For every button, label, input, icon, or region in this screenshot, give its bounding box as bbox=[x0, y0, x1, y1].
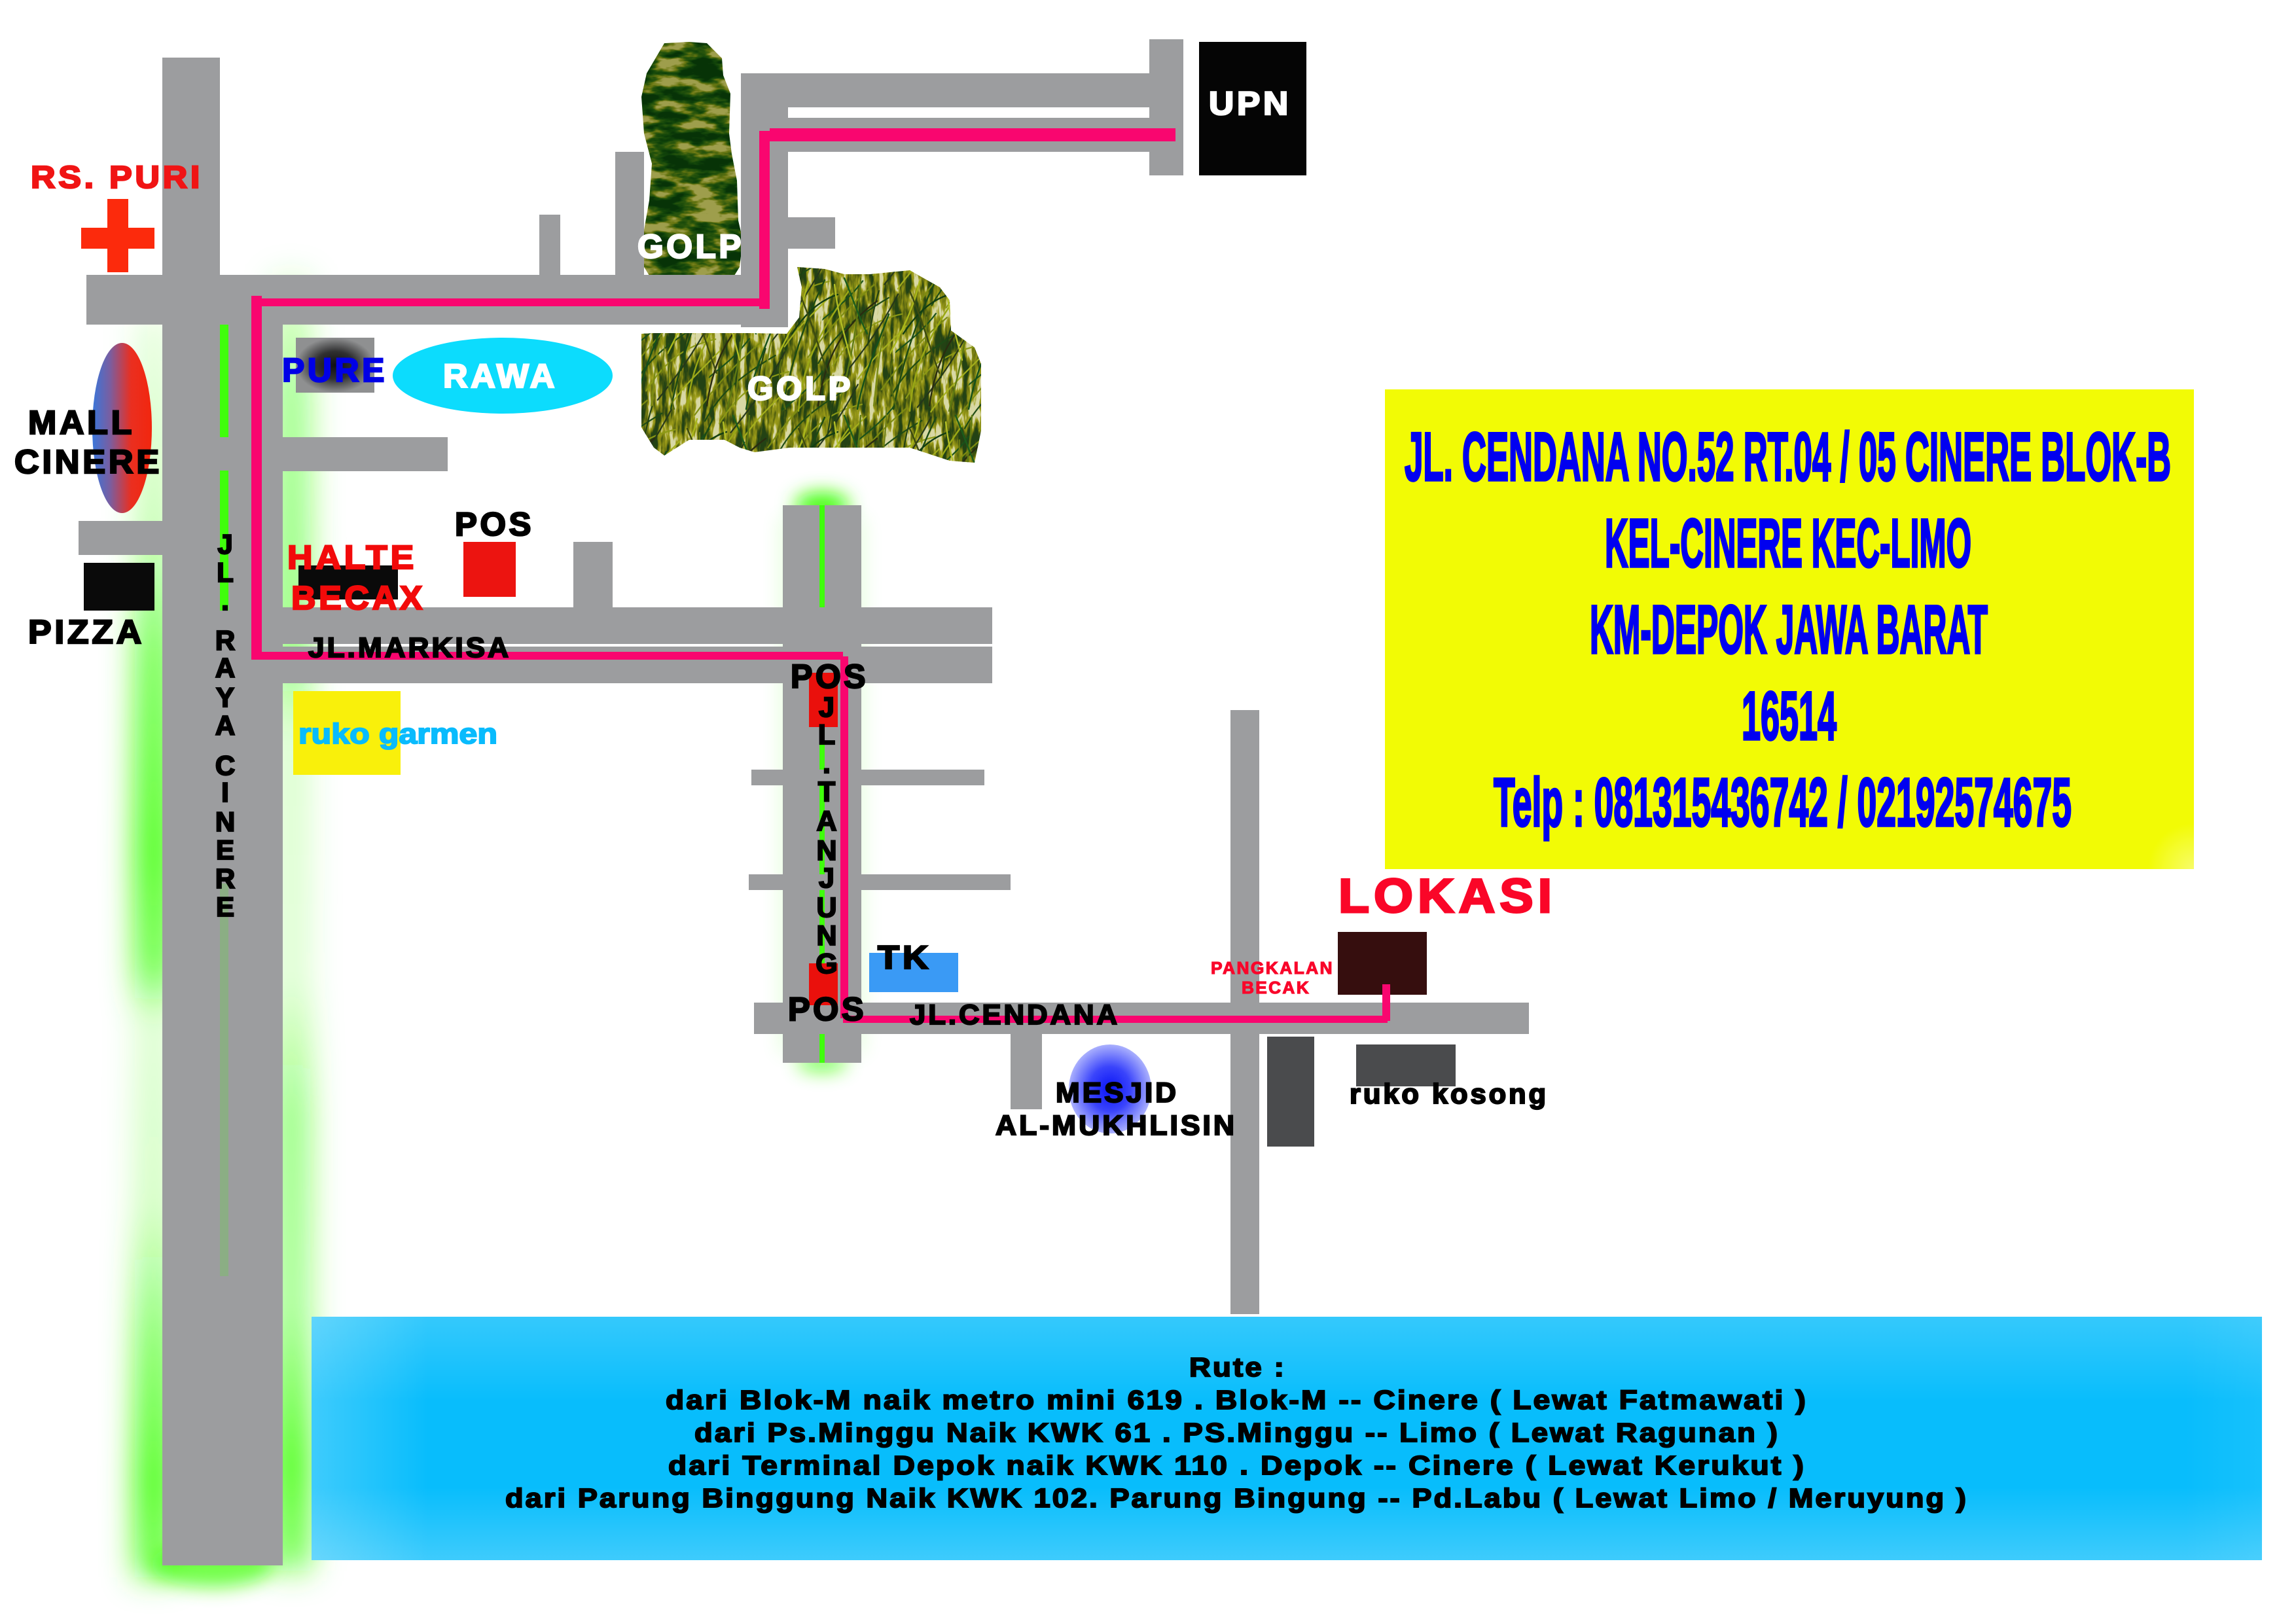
label: HALTE BECAX bbox=[287, 539, 425, 616]
label: JL. TANJUNG vertical: L bbox=[818, 719, 835, 751]
label: MESJID AL-MUKHLISIN: MESJID bbox=[1056, 1077, 1179, 1109]
label: JL. RAYA CINERE vertical: R bbox=[215, 863, 235, 894]
panel: address bbox=[1385, 389, 2194, 869]
address text: 16514 bbox=[1742, 678, 1837, 755]
label: GOLP large: GOLP bbox=[747, 370, 853, 407]
lower pos on Jl. Tanjung bbox=[809, 963, 838, 1005]
label: PANGKALAN BECAK: PANGKALAN bbox=[1211, 958, 1334, 978]
label: JL. RAYA CINERE vertical: E bbox=[216, 891, 234, 922]
label: JL. RAYA CINERE vertical: L bbox=[217, 557, 234, 588]
label: JL. TANJUNG vertical: A bbox=[816, 806, 837, 837]
label: JL. RAYA CINERE vertical: E bbox=[216, 834, 234, 865]
label: JL.MARKISA: JL.MARKISA bbox=[308, 632, 511, 664]
label: JL. TANJUNG vertical: J bbox=[819, 692, 834, 723]
address text bbox=[1405, 419, 2171, 841]
label: JL. RAYA CINERE vertical: N bbox=[215, 806, 235, 837]
ruko garmen block bbox=[293, 691, 401, 775]
label: JL. RAYA CINERE vertical: Y bbox=[216, 682, 234, 713]
label: JL.CENDANA: JL.CENDANA bbox=[910, 999, 1120, 1031]
label: RS. PURI: RS. PURI bbox=[31, 160, 203, 195]
label: PURE: PURE bbox=[282, 351, 387, 389]
label: JL. RAYA CINERE vertical: I bbox=[221, 777, 229, 808]
upper pos on Jl. Tanjung bbox=[809, 673, 838, 727]
pizza block bbox=[84, 563, 154, 611]
route text: Rute : bbox=[1189, 1352, 1286, 1382]
label: UPN: UPN bbox=[1209, 85, 1291, 122]
route text: dari Ps.Minggu Naik KWK 61 . PS.Minggu -- Limo ( Lewat Ragunan ) bbox=[694, 1418, 1780, 1448]
icon: red cross RS. Puri bbox=[81, 199, 154, 272]
route text bbox=[505, 1352, 1968, 1513]
ruko kosong block bbox=[1356, 1044, 1456, 1086]
label: PIZZA: PIZZA bbox=[28, 613, 145, 651]
route text: dari Parung Binggung Naik KWK 102. Parung Bingung -- Pd.Labu ( Lewat Limo / Meruyung ) bbox=[505, 1483, 1968, 1513]
lokasi building bbox=[1338, 932, 1427, 995]
label: PANGKALAN BECAK bbox=[1211, 958, 1334, 997]
label: JL. TANJUNG vertical: U bbox=[816, 892, 837, 923]
label: JL. TANJUNG vertical: N bbox=[816, 920, 837, 952]
label: ruko garmen: ruko garmen bbox=[298, 718, 497, 750]
label: PANGKALAN BECAK: BECAK bbox=[1242, 978, 1310, 997]
halte becak block bbox=[298, 565, 398, 599]
label: JL. RAYA CINERE vertical bbox=[215, 529, 235, 922]
label: MALL CINERE bbox=[14, 404, 162, 480]
label: HALTE BECAX: HALTE bbox=[287, 539, 417, 576]
label: JL. TANJUNG vertical: . bbox=[823, 748, 831, 779]
rawa lake bbox=[393, 338, 613, 414]
label: JL. RAYA CINERE vertical: . bbox=[221, 585, 229, 616]
pos block bbox=[463, 542, 516, 597]
label: JL. RAYA CINERE vertical: J bbox=[217, 529, 233, 560]
label: MALL CINERE: CINERE bbox=[14, 443, 162, 480]
pure block bbox=[296, 338, 374, 393]
median strips bbox=[220, 325, 825, 1276]
route text: dari Terminal Depok naik KWK 110 . Depok -- Cinere ( Lewat Kerukut ) bbox=[668, 1450, 1806, 1480]
label: LOKASI: LOKASI bbox=[1338, 870, 1556, 923]
mall cinere ellipse bbox=[92, 343, 152, 513]
label: JL. TANJUNG vertical: T bbox=[818, 776, 835, 808]
route text: dari Blok-M naik metro mini 619 . Blok-M -- Cinere ( Lewat Fatmawati ) bbox=[666, 1385, 1808, 1415]
mosque ellipse bbox=[1069, 1044, 1151, 1133]
label: JL. TANJUNG vertical bbox=[816, 692, 838, 980]
label: JL. RAYA CINERE vertical: C bbox=[215, 750, 235, 781]
label: lower POS: POS bbox=[788, 991, 867, 1027]
label: MALL CINERE: MALL bbox=[28, 404, 135, 441]
golf course: large bbox=[638, 265, 985, 465]
golf course: small bbox=[641, 42, 741, 275]
label: RAWA: RAWA bbox=[443, 357, 558, 395]
label: HALTE BECAX: BECAX bbox=[291, 579, 425, 616]
label: JL. TANJUNG vertical: N bbox=[816, 835, 837, 866]
green glow: main road bbox=[135, 275, 310, 1588]
label: JL. RAYA CINERE vertical: A bbox=[215, 710, 235, 741]
panel: route directions bbox=[312, 1317, 2262, 1560]
label: JL. RAYA CINERE vertical: R bbox=[215, 625, 235, 656]
road network bbox=[79, 39, 1529, 1565]
green glow: Jl. Tanjung bbox=[779, 492, 865, 1072]
TK block bbox=[869, 953, 958, 992]
label: TK: TK bbox=[878, 939, 931, 976]
label: ruko kosong: ruko kosong bbox=[1350, 1079, 1549, 1110]
label: JL. TANJUNG vertical: J bbox=[819, 863, 834, 894]
label: MESJID AL-MUKHLISIN: AL-MUKHLISIN bbox=[996, 1110, 1237, 1141]
label: GOLP small: GOLP bbox=[637, 228, 744, 265]
label: JL. TANJUNG vertical: G bbox=[816, 948, 838, 980]
label: upper POS: POS bbox=[791, 658, 869, 695]
route line bbox=[251, 128, 1390, 1023]
UPN block bbox=[1199, 42, 1306, 175]
label: POS: POS bbox=[455, 506, 534, 543]
dark building bbox=[1267, 1037, 1314, 1147]
label: JL. RAYA CINERE vertical: A bbox=[215, 652, 235, 683]
label: MESJID AL-MUKHLISIN bbox=[996, 1077, 1237, 1141]
